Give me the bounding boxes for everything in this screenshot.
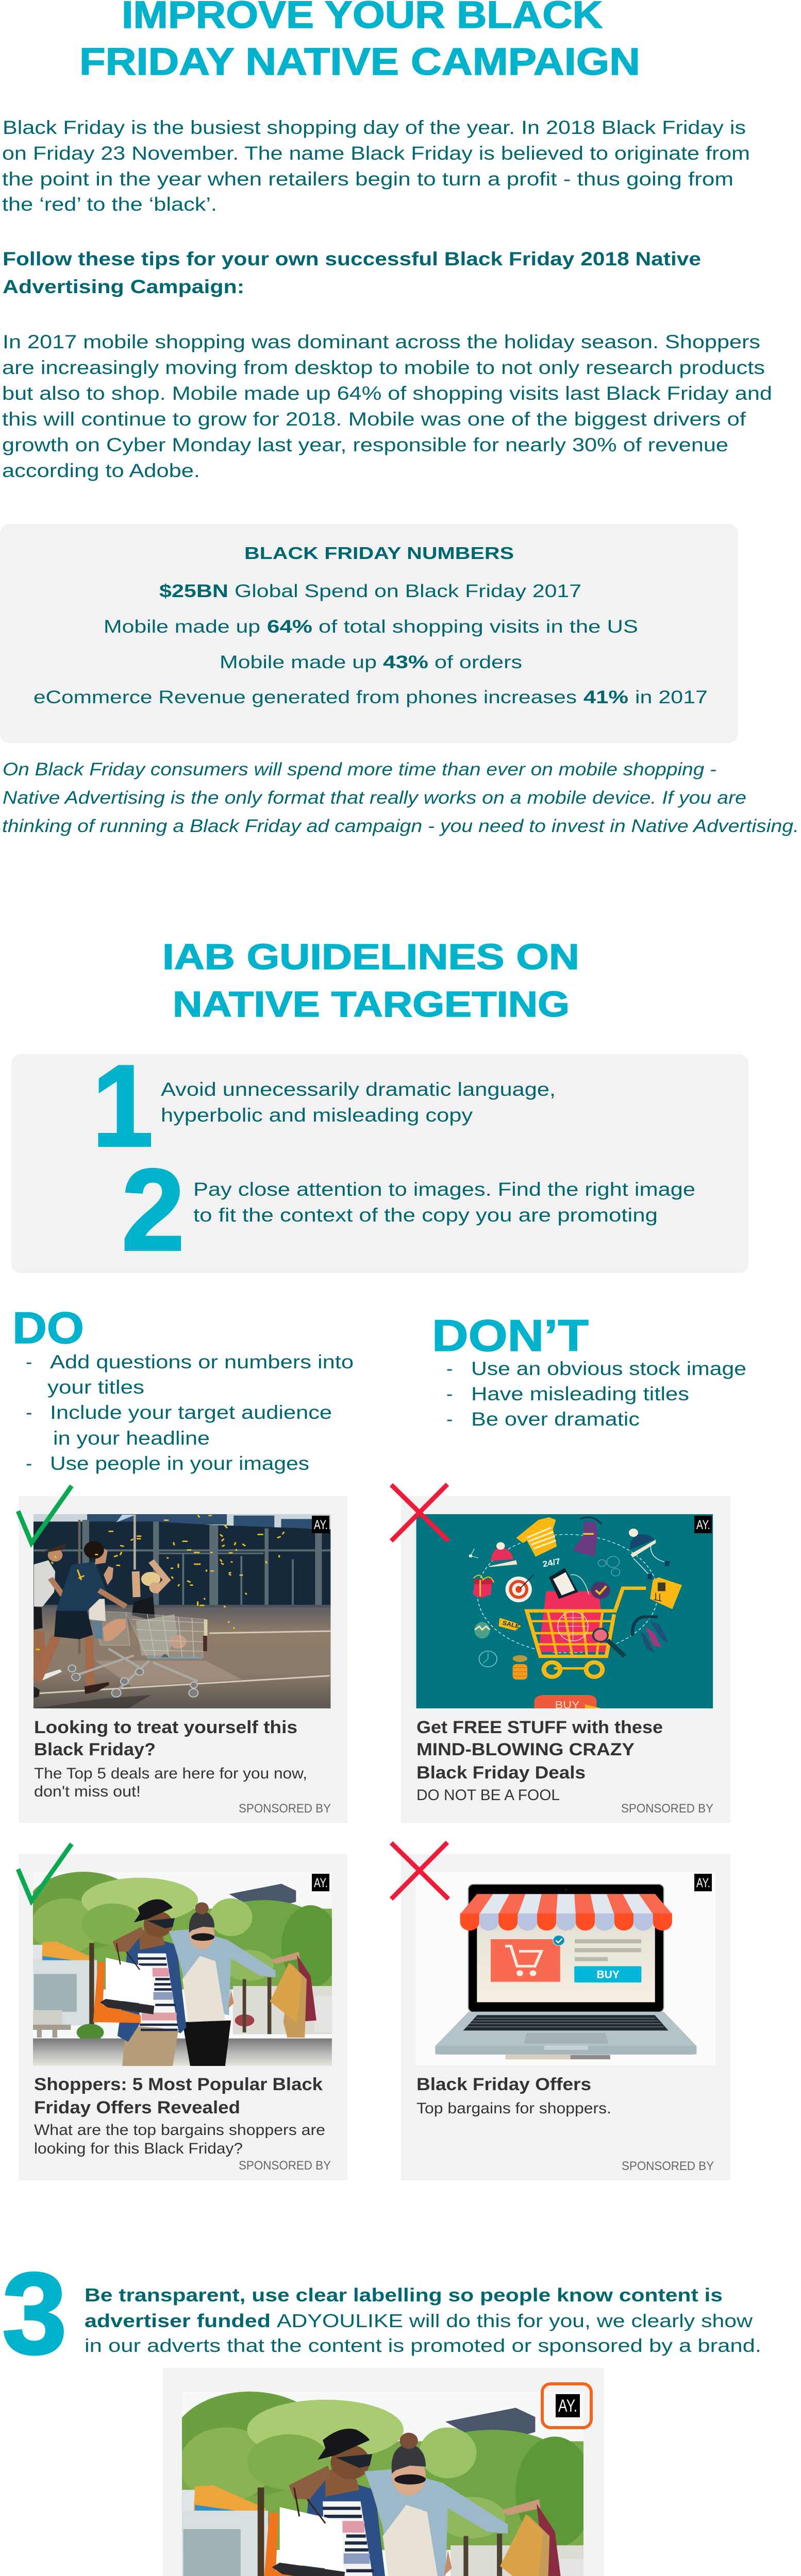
logo: AY: AY.	[696, 1518, 710, 1532]
don't list: -	[446, 1358, 453, 1379]
panel: black friday numbers: in 2017	[635, 687, 708, 707]
don't list: Be over dramatic	[471, 1409, 640, 1430]
do list: -	[26, 1453, 32, 1474]
panel: guidelines 1 and 2	[11, 1041, 748, 1275]
card: free stuff	[401, 1496, 730, 1823]
card 3 text: Friday Offers Revealed	[34, 2098, 240, 2117]
bold tips intro: Advertising Campaign:	[3, 276, 244, 297]
panel: black friday numbers: Mobile made up	[220, 652, 377, 672]
card 3 text: Shoppers: 5 Most Popular Black	[34, 2075, 323, 2094]
logo: AY: AY.	[314, 1876, 328, 1890]
mobile shopping paragraph: but also to shop. Mobile made up 64% of shopping visits last Black Friday and	[2, 383, 772, 404]
photo: couple with shopping bags	[172, 2392, 594, 2576]
mobile shopping paragraph	[2, 331, 772, 481]
bold tips intro	[3, 248, 701, 297]
card 2 text: Get FREE STUFF with these	[416, 1718, 663, 1737]
italic closing note: On Black Friday consumers will spend more time than ever on mobile shopping -	[3, 759, 716, 779]
card 4 text: SPONSORED BY	[622, 2159, 714, 2173]
heading: do: DO	[12, 1303, 84, 1353]
number 3: 3	[2, 2248, 67, 2378]
panel: black friday numbers: Mobile made up	[104, 617, 260, 637]
intro paragraph: Black Friday is the busiest shopping day of the year. In 2018 Black Friday is	[3, 117, 746, 138]
number 2: 2	[122, 1145, 185, 1275]
logo: AY	[312, 1874, 329, 1891]
highlight: logo	[542, 2384, 591, 2428]
title: FRIDAY NATIVE CAMPAIGN	[79, 40, 640, 83]
mobile shopping paragraph: according to Adobe.	[2, 460, 200, 481]
logo: AY	[694, 1516, 712, 1533]
card 2 text: SPONSORED BY	[621, 1802, 713, 1816]
panel: black friday numbers: 64%	[267, 617, 312, 637]
photo: friends with shopping cart	[31, 1510, 330, 1708]
card: shoppers most popular	[19, 1854, 347, 2180]
bold tips intro: Follow these tips for your own successful Black Friday 2018 Native	[3, 248, 701, 269]
illustration: shopping cart and icons: BUY	[555, 1699, 580, 1711]
photo: couple with shopping bags	[25, 1872, 340, 2066]
number 1: 1	[92, 1041, 153, 1171]
don't list: -	[446, 1409, 453, 1430]
heading: IAB guidelines: IAB GUIDELINES ON	[162, 937, 579, 977]
panel: black friday numbers: Global Spend on Black Friday 2017	[235, 581, 581, 601]
do list: Add questions or numbers into	[50, 1351, 354, 1372]
don't list: -	[446, 1383, 453, 1404]
italic closing note	[2, 759, 799, 836]
mobile shopping paragraph: In 2017 mobile shopping was dominant across the holiday season. Shoppers	[3, 331, 760, 352]
logo: AY: AY.	[314, 1518, 328, 1532]
card 3 text: What are the top bargains shoppers are	[34, 2122, 325, 2139]
illustration: laptop shop	[415, 1872, 715, 2066]
heading: don't: DON’T	[432, 1311, 589, 1361]
card 1 text: The Top 5 deals are here for you now,	[34, 1765, 307, 1782]
card 2 text: Black Friday Deals	[416, 1763, 586, 1783]
card 4 text: Top bargains for shoppers.	[416, 2100, 611, 2117]
illustration: shopping cart and icons: 24/7	[542, 1556, 561, 1569]
illustration: shopping cart and icons	[416, 1514, 713, 1711]
intro paragraph: on Friday 23 November. The name Black Friday is believed to originate from	[2, 143, 750, 164]
do list: in your headline	[53, 1428, 210, 1449]
guideline 2 text: to fit the context of the copy you are promoting	[193, 1205, 658, 1226]
don't list: Use an obvious stock image	[471, 1358, 746, 1379]
don't list	[446, 1358, 746, 1430]
card 3 text	[34, 2075, 331, 2173]
tip 3 text: in our adverts that the content is promoted or sponsored by a brand.	[85, 2335, 761, 2356]
do list: -	[26, 1402, 32, 1423]
panel: black friday numbers: of orders	[435, 652, 522, 672]
card 1 text: SPONSORED BY	[239, 1802, 331, 1816]
card 2 text: MIND-BLOWING CRAZY	[416, 1740, 635, 1759]
logo: AY	[312, 1516, 329, 1533]
card 3 text: looking for this Black Friday?	[34, 2140, 243, 2157]
panel: black friday numbers	[0, 524, 738, 743]
tip 3 text: Be transparent, use clear labelling so people know content is	[85, 2284, 723, 2306]
intro paragraph: the point in the year when retailers begin to turn a profit - thus going from	[2, 168, 733, 190]
intro paragraph	[2, 117, 750, 215]
card: labelled ad example	[163, 2368, 604, 2576]
card: looking to treat yourself	[19, 1496, 347, 1823]
icon: red cross	[391, 1484, 448, 1541]
do list	[26, 1351, 354, 1474]
tip 3 text: ADYOULIKE will do this for you, we clearly show	[277, 2310, 753, 2331]
panel: black friday numbers: eCommerce Revenue generated from phones increases	[34, 687, 577, 707]
illustration: shopping cart and icons: SALE	[502, 1619, 521, 1630]
card 4 text: Black Friday Offers	[416, 2075, 591, 2094]
italic closing note: thinking of running a Black Friday ad campaign - you need to invest in Native Advertising.	[2, 816, 799, 836]
do list: Use people in your images	[50, 1453, 309, 1474]
mobile shopping paragraph: growth on Cyber Monday last year, responsible for nearly 30% of revenue	[2, 434, 728, 455]
card 4 text	[416, 2075, 714, 2173]
mobile shopping paragraph: are increasingly moving from desktop to mobile to not only research products	[2, 357, 765, 378]
card 2 text	[416, 1718, 713, 1816]
illustration: laptop shop: BUY	[596, 1968, 620, 1980]
panel: black friday numbers: of total shopping visits in the US	[319, 617, 638, 637]
card 1 text	[34, 1718, 331, 1816]
guideline 1 text: hyperbolic and misleading copy	[161, 1105, 473, 1126]
card 1 text: don't miss out!	[34, 1783, 141, 1800]
italic closing note: Native Advertising is the only format that really works on a mobile device. If you are	[3, 788, 746, 808]
card 2 text: DO NOT BE A FOOL	[416, 1787, 560, 1804]
panel: black friday numbers: BLACK FRIDAY NUMBERS	[244, 544, 514, 563]
guideline 1 text	[161, 1079, 556, 1126]
card: black friday offers	[401, 1854, 730, 2180]
title	[79, 0, 640, 83]
tip 3 text	[85, 2284, 761, 2356]
icon: green check	[18, 1844, 72, 1901]
logo: AY	[694, 1874, 712, 1891]
logo: AY: AY.	[696, 1876, 710, 1890]
panel: black friday numbers: 41%	[583, 687, 628, 707]
mobile shopping paragraph: this will continue to grow for 2018. Mobile was one of the biggest drivers of	[2, 409, 746, 430]
guideline 2 text	[193, 1179, 695, 1226]
panel: black friday numbers: $25BN	[159, 581, 228, 601]
card 1 text: Looking to treat yourself this	[34, 1718, 297, 1737]
do list: -	[26, 1351, 32, 1372]
heading: IAB guidelines: NATIVE TARGETING	[173, 984, 570, 1024]
guideline 1 text: Avoid unnecessarily dramatic language,	[161, 1079, 556, 1100]
icon: green check	[18, 1486, 72, 1543]
intro paragraph: the ‘red’ to the ‘black’.	[2, 194, 217, 215]
heading: IAB guidelines	[162, 937, 579, 1024]
logo: AY	[556, 2394, 580, 2417]
icon: red cross	[391, 1842, 448, 1899]
card 1 text: Black Friday?	[34, 1740, 156, 1759]
do list: your titles	[47, 1377, 144, 1398]
do list: Include your target audience	[50, 1402, 332, 1423]
logo: AY: AY.	[558, 2396, 577, 2416]
tip 3 text: advertiser funded	[85, 2310, 271, 2331]
card 3 text: SPONSORED BY	[239, 2159, 331, 2173]
don't list: Have misleading titles	[471, 1383, 689, 1404]
panel: black friday numbers: 43%	[383, 652, 428, 672]
guideline 2 text: Pay close attention to images. Find the right image	[193, 1179, 695, 1200]
